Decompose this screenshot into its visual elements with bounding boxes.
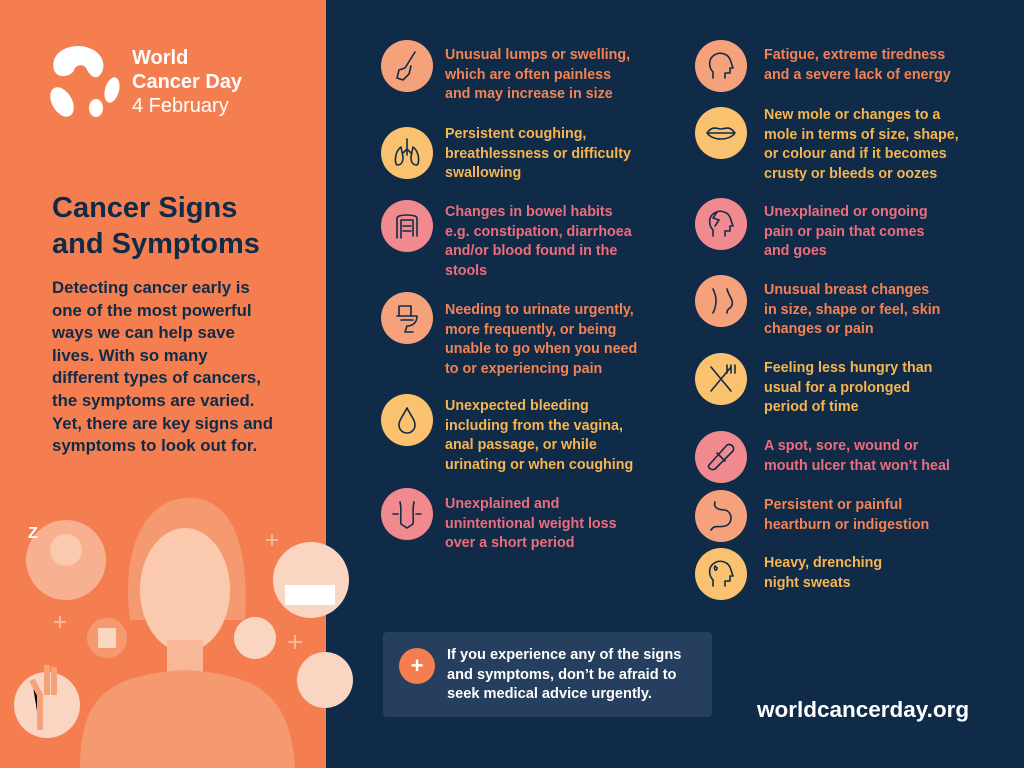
text: Unusual lumps or swelling, [445, 47, 630, 63]
text: Fatigue, extreme tiredness [764, 47, 945, 63]
text: Unexplained or ongoing [764, 204, 928, 220]
text: Persistent or painful [764, 497, 902, 513]
text: Unexpected bleeding [445, 398, 589, 414]
logo: Cancer Day [132, 71, 242, 93]
text: urinating or when coughing [445, 456, 633, 472]
title [52, 192, 260, 260]
url: worldcancerday.org [757, 697, 969, 722]
logo: 4 February [132, 95, 229, 117]
text: unable to go when you need [445, 341, 637, 357]
text: New mole or changes to a [764, 107, 940, 123]
text: unintentional weight loss [445, 516, 617, 532]
text: which are often painless [445, 66, 611, 82]
intro text: ways we can help save [52, 323, 235, 342]
item: bleeding [381, 394, 633, 472]
intro text: one of the most powerful [52, 301, 252, 320]
item: fatigue [695, 40, 951, 92]
intro text [52, 278, 273, 455]
text: Unexplained and [445, 496, 559, 512]
text: Unusual breast changes [764, 282, 929, 298]
text: night sweats [764, 574, 851, 590]
text: e.g. constipation, diarrhoea [445, 224, 632, 240]
text: Changes in bowel habits [445, 204, 613, 220]
text: and a severe lack of energy [764, 66, 951, 82]
item: mole [695, 107, 959, 182]
text: Heavy, drenching [764, 555, 882, 571]
text: and/or blood found in the [445, 243, 617, 259]
illustration: person with symptom circles [14, 498, 353, 768]
text: over a short period [445, 535, 574, 551]
icon: medical speech bubble [399, 648, 435, 684]
logo: World [132, 47, 188, 69]
intro text: different types of cancers, [52, 368, 261, 387]
text: more frequently, or being [445, 322, 616, 338]
text: usual for a prolonged [764, 380, 910, 396]
text: and may increase in size [445, 86, 613, 102]
item: breast [695, 275, 940, 337]
intro text: the symptoms are varied. [52, 391, 254, 410]
item: coughing [381, 126, 631, 181]
text: including from the vagina, [445, 418, 623, 434]
item: pain [695, 198, 928, 259]
icon: medical speech bubble: + [411, 653, 423, 678]
callout: and symptoms, don’t be afraid to [447, 666, 676, 682]
text: changes or pain [764, 321, 874, 337]
intro text: Detecting cancer early is [52, 278, 250, 297]
text: stools [445, 262, 487, 278]
logo [50, 46, 242, 117]
text: in size, shape or feel, skin [764, 302, 940, 318]
text: anal passage, or while [445, 437, 597, 453]
item: sore [695, 431, 950, 483]
text: Persistent coughing, [445, 126, 586, 142]
callout: seek medical advice urgently. [447, 686, 652, 702]
text: swallowing [445, 165, 521, 181]
text: crusty or bleeds or oozes [764, 166, 937, 182]
title: and Symptoms [52, 228, 260, 260]
text: Feeling less hungry than [764, 360, 932, 376]
text: Needing to urinate urgently, [445, 302, 634, 318]
intro text: lives. With so many [52, 346, 208, 365]
text: A spot, sore, wound or [764, 438, 918, 454]
panel: left orange [0, 0, 326, 768]
intro text: Yet, there are key signs and [52, 414, 273, 433]
text: heartburn or indigestion [764, 516, 929, 532]
text: to or experiencing pain [445, 360, 602, 376]
item: bowel [381, 200, 632, 278]
item: sweats [695, 548, 882, 600]
item: weight loss [381, 488, 617, 551]
item: urinate [381, 292, 637, 376]
text: mole in terms of size, shape, [764, 126, 959, 142]
text: period of time [764, 399, 859, 415]
illustration: person with symptom circles: Z [28, 525, 38, 542]
text: pain or pain that comes [764, 224, 924, 240]
item: hungry [695, 353, 932, 415]
intro text: symptoms to look out for. [52, 436, 257, 455]
callout: If you experience any of the signs [447, 647, 681, 663]
callout [383, 632, 712, 717]
title: Cancer Signs [52, 192, 237, 224]
item: lumps [381, 40, 630, 102]
text: or colour and if it becomes [764, 146, 947, 162]
text: and goes [764, 243, 827, 259]
text: mouth ulcer that won’t heal [764, 458, 950, 474]
text: breathlessness or difficulty [445, 146, 631, 162]
item: heartburn [695, 490, 929, 542]
